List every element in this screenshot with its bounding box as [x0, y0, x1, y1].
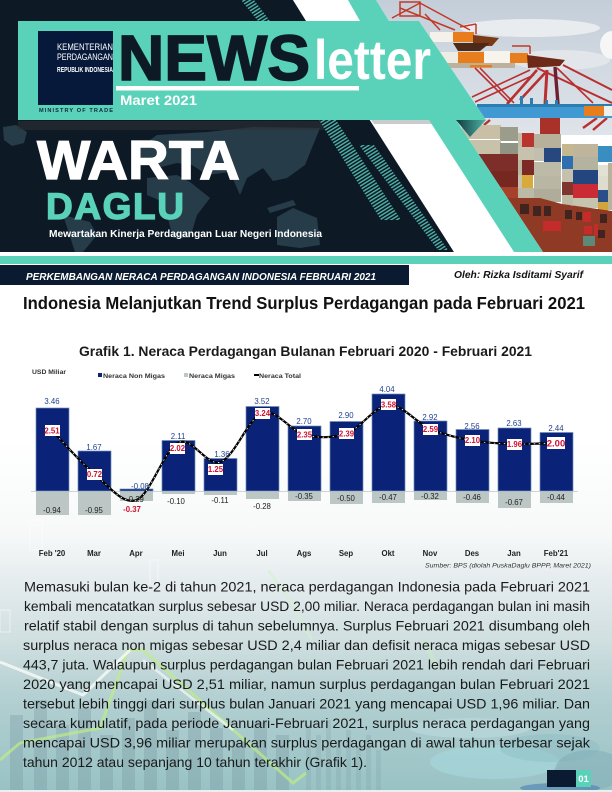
section bar: [0, 265, 409, 285]
values: Neraca Migas: -0.50: [337, 494, 356, 503]
values: Neraca Non Migas: 2.44: [548, 424, 564, 433]
logo: Kementerian Perdagangan: [38, 31, 113, 114]
bars: Neraca Non Migas: [36, 394, 573, 491]
logo: Kementerian Perdagangan: REPUBLIK INDONESIA: [57, 65, 113, 74]
header dark background: [0, 0, 454, 252]
body paragraph: tersebut lebih tinggi dari surplus bulan Januari 2021 yang mencapai USD 1,96 miliar. Dan: [23, 696, 590, 712]
month labels: Jul: [256, 549, 268, 558]
crane legs: [472, 65, 612, 130]
month labels: Nov: [423, 549, 438, 558]
author: Oleh: Rizka Isditami Syarif: [454, 269, 584, 281]
values: Neraca Migas: -0.67: [505, 498, 523, 507]
month labels: Ags: [297, 549, 312, 558]
values: Neraca Non Migas: 3.46: [44, 397, 60, 406]
header banner: [0, 0, 612, 252]
values: Neraca Total: 2.02: [170, 444, 186, 453]
title: NEWS: NEWS: [118, 22, 310, 94]
body paragraph: relatif stabil dengan surplus di tahun sebelumnya. Surplus Februari 2021 disumbang oleh: [24, 618, 590, 634]
values: Neraca Total: 2.00: [547, 438, 565, 450]
values: Neraca Non Migas: 4.04: [379, 385, 395, 394]
values: Neraca Non Migas: 3.52: [254, 397, 270, 406]
month labels: Mar: [87, 549, 101, 558]
body paragraph: kembali mencatatkan surplus sebesar USD 2,00 miliar. Neraca perdagangan bulan ini masih: [24, 599, 590, 614]
body paragraph: 2020 yang mencapai USD 2,51 miliar, namun surplus perdagangan bulan Februari 2021: [23, 677, 590, 692]
values: Neraca Migas: -0.28: [253, 502, 271, 511]
source note: Sumber: BPS (diolah PuskaDaglu BPPP, Maret 2021): [425, 562, 591, 570]
values: Neraca Non Migas: 2.56: [464, 422, 480, 431]
month labels: Apr: [129, 549, 143, 558]
values: Neraca Migas: -0.35: [295, 492, 314, 501]
body paragraph: mencapai USD 3,96 miliar merupakan surplus perdagangan di awal tahun terbesar sejak: [23, 736, 590, 750]
month labels: Okt: [382, 549, 395, 558]
values: Neraca Migas: -0.95: [85, 506, 104, 515]
chart: Neraca Perdagangan: [31, 344, 591, 570]
month labels: Feb '20: [39, 549, 66, 558]
page number: [547, 770, 591, 787]
values: Neraca Total: 2.10: [465, 436, 481, 445]
heading: DAGLU: DAGLU: [46, 186, 184, 227]
values: Neraca Non Migas: [44, 385, 564, 491]
chart title: Grafik 1. Neraca Perdagangan Bulanan Februari 2020 - Februari 2021: [79, 344, 532, 359]
values: Neraca Migas: -0.10: [167, 497, 186, 506]
logo: Kementerian Perdagangan: KEMENTERIAN: [57, 42, 113, 53]
rule under title: [116, 86, 359, 90]
legend: Neraca Migas: [189, 373, 235, 380]
values: Neraca Total: 2.51: [44, 426, 60, 436]
ship hull: [500, 198, 612, 252]
body paragraph: Memasuki bulan ke-2 di tahun 2021, neraca perdagangan Indonesia pada Februari 2021: [24, 580, 590, 594]
axis: [31, 490, 578, 492]
line: Neraca Total: [52, 405, 556, 501]
title: letter: letter: [314, 28, 431, 91]
values: Neraca Non Migas: 2.11: [171, 432, 185, 441]
values: Neraca Migas: -0.11: [211, 496, 229, 505]
values: Neraca Non Migas: 2.90: [338, 411, 354, 420]
main headline: Indonesia Melanjutkan Trend Surplus Perdagangan pada Februari 2021: [23, 293, 585, 313]
world map silhouette: [3, 125, 320, 252]
date: Maret 2021: [120, 92, 197, 108]
logo: Kementerian Perdagangan: MINISTRY OF TRADE: [39, 108, 113, 114]
values: Neraca Non Migas: 2.63: [506, 419, 522, 428]
values: Neraca Migas: -0.47: [379, 493, 397, 502]
decorative coins: [410, 718, 612, 792]
body paragraph: secara kumulatif, pada periode Januari-Februari 2021, surplus neraca perdagangan yang: [23, 716, 590, 731]
body paragraph: surplus neraca non migas sebesar USD 2,4 miliar dan defisit neraca migas sebesar USD: [23, 638, 590, 653]
values: Neraca Non Migas: -0.08: [131, 482, 149, 491]
body paragraph: [23, 580, 590, 770]
teal divider bar: [0, 256, 612, 264]
values: Neraca Migas: [43, 492, 566, 515]
values: Neraca Total: 1.25: [208, 465, 224, 474]
body paragraph: 443,7 juta. Walaupun surplus perdagangan bulan Februari 2021 lebih rendah dari Februari: [23, 658, 590, 672]
values: Neraca Non Migas: 2.92: [422, 413, 438, 422]
values: Neraca Total: 3.58: [381, 400, 397, 410]
body paragraph: tahun 2012 atau sepanjang 10 tahun terakhir (Grafik 1).: [23, 755, 367, 770]
month labels: Jan: [507, 549, 521, 558]
legend: [98, 373, 301, 380]
month labels: [39, 549, 569, 558]
hatched diagonal stripes: [241, 0, 448, 250]
containers: [462, 125, 612, 211]
white diagonal strips: [293, 0, 514, 252]
logo: Kementerian Perdagangan: PERDAGANGAN: [57, 52, 113, 63]
month labels: Mei: [172, 549, 184, 558]
page background: [0, 440, 612, 792]
values: Neraca Migas: -0.94: [43, 506, 62, 515]
unit label: USD Miliar: [32, 369, 66, 376]
teal title panel: [18, 21, 486, 120]
legend: Neraca Non Migas: [103, 373, 165, 380]
top crane lattice: [392, 2, 530, 54]
teal diagonal bands: [348, 0, 543, 252]
values: Neraca Non Migas: 1.67: [86, 443, 102, 452]
values: Neraca Migas: -0.32: [421, 492, 439, 501]
month labels: Feb'21: [544, 549, 569, 558]
values: Neraca Total: 3.24: [255, 409, 271, 418]
values: Neraca Migas: -0.29: [126, 495, 144, 504]
values: Neraca Total: 2.59: [423, 425, 439, 434]
page number: 01: [578, 774, 589, 785]
values: Neraca Total: 0.72: [87, 470, 103, 479]
photo: port cranes and containers: [370, 0, 612, 252]
values: Neraca Total: [44, 399, 565, 514]
month labels: Sep: [339, 549, 353, 558]
values: Neraca Total: 2.39: [339, 430, 355, 438]
legend: Neraca Total: [259, 373, 301, 380]
section bar: PERKEMBANGAN NERACA PERDAGANGAN INDONESIA FEBRUARI 2021: [26, 271, 376, 283]
values: Neraca Total: 2.35: [297, 430, 313, 440]
values: Neraca Migas: -0.46: [463, 493, 481, 502]
bars: Neraca Migas: [36, 491, 573, 515]
tagline: Mewartakan Kinerja Perdagangan Luar Negeri Indonesia: [49, 228, 322, 240]
values: Neraca Non Migas: 2.70: [296, 417, 312, 426]
crane blue beam: [477, 107, 612, 118]
values: Neraca Total: -0.37: [123, 505, 141, 514]
values: Neraca Total: 1.96: [507, 440, 523, 449]
values: Neraca Migas: -0.44: [547, 493, 566, 502]
values: Neraca Non Migas: 1.36: [214, 450, 230, 459]
month labels: Jun: [213, 549, 227, 558]
month labels: Des: [465, 549, 480, 558]
heading: WARTA: WARTA: [37, 129, 240, 191]
crane platforms: [430, 32, 453, 42]
